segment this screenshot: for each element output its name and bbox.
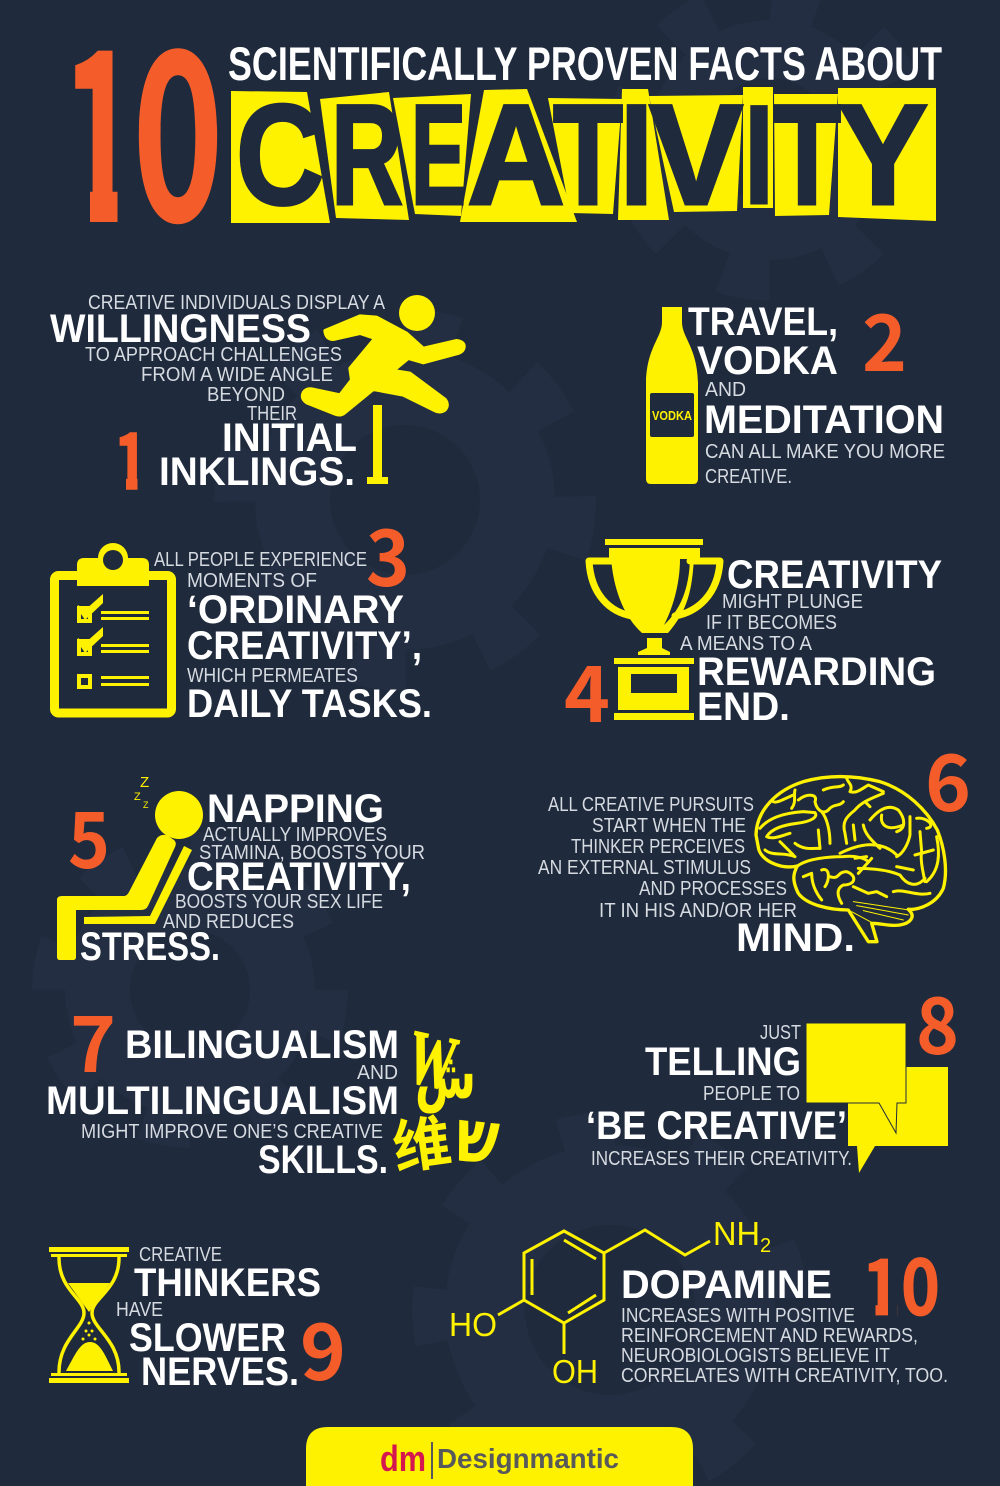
panel: fact 9 slower nerves — [49, 1243, 346, 1403]
text: fact 8: JUST — [760, 1021, 801, 1044]
panel: fact 4 rewarding end — [564, 539, 942, 745]
panel: fact 10 dopamine — [449, 1215, 948, 1390]
number 10: 10 — [862, 1226, 940, 1338]
panel: fact 7 bilingualism — [46, 983, 503, 1186]
footer logo tab — [306, 1427, 693, 1486]
text: fact 7: MIGHT IMPROVE ONE’S CREATIVE — [81, 1120, 383, 1143]
text: fact 5: AND REDUCES — [163, 910, 294, 933]
number 2: 2 — [862, 282, 907, 394]
text: fact 5: ACTUALLY IMPROVES — [203, 823, 387, 846]
icon: speech bubbles — [806, 1023, 948, 1173]
CREATIVITY cut-out letters: V — [649, 76, 743, 235]
text: fact 10 — [621, 1263, 948, 1387]
number 9: 9 — [300, 1291, 346, 1403]
text: fact 1: FROM A WIDE ANGLE — [141, 363, 333, 386]
text: fact 4: MIGHT PLUNGE — [722, 590, 863, 613]
text: fact 9: CREATIVE — [139, 1243, 222, 1266]
text: fact 2 — [688, 300, 945, 488]
icon: multilingual glyphs: 维 — [387, 1095, 456, 1186]
icon: sleeping figure — [57, 774, 203, 960]
text: fact 4: REWARDING — [697, 650, 936, 694]
icon: multilingual glyphs — [387, 1014, 503, 1186]
text: fact 7: SKILLS. — [258, 1138, 388, 1182]
text: fact 6: IT IN HIS AND/OR HER — [599, 899, 797, 922]
CREATIVITY cut-out letters: I — [743, 76, 775, 235]
CREATIVITY cut-out letters: R — [331, 76, 403, 235]
text: fact 8: ‘BE CREATIVE’ — [586, 1104, 847, 1148]
CREATIVITY cut-out letters — [231, 76, 936, 235]
text: fact 8 — [586, 1021, 852, 1170]
icon: multilingual glyphs: ش — [415, 1038, 476, 1114]
text: fact 10: REINFORCEMENT AND REWARDS, — [621, 1324, 918, 1347]
panel: fact 6 brain — [538, 722, 971, 960]
icon: vodka bottle — [646, 307, 698, 484]
panel: fact 3 ordinary creativity — [54, 497, 432, 726]
text: fact 6: ALL CREATIVE PURSUITS — [548, 793, 754, 816]
text: fact 1: WILLINGNESS — [50, 307, 311, 351]
text: fact 10: NEUROBIOLOGISTS BELIEVE IT — [621, 1344, 890, 1367]
text: fact 3 — [154, 548, 432, 726]
text: fact 6: MIND. — [736, 916, 855, 960]
text: fact 5: BOOSTS YOUR SEX LIFE — [175, 890, 383, 913]
icon: hourglass — [49, 1247, 129, 1383]
text: fact 3: ‘ORDINARY — [187, 588, 404, 632]
text: fact 5: NAPPING — [207, 787, 384, 831]
text: fact 5 — [80, 787, 425, 969]
number 1: 1 — [114, 400, 148, 512]
text: fact 9: SLOWER — [129, 1316, 286, 1360]
text: fact 8: PEOPLE TO — [703, 1082, 800, 1105]
text: fact 8: INCREASES THEIR CREATIVITY. — [591, 1147, 852, 1170]
text: fact 2: MEDITATION — [704, 398, 944, 442]
text: fact 10: DOPAMINE — [621, 1263, 832, 1307]
text: fact 10: INCREASES WITH POSITIVE — [621, 1304, 855, 1327]
text: fact 9: NERVES. — [141, 1350, 299, 1394]
text: fact 1: CREATIVE INDIVIDUALS DISPLAY A — [88, 291, 385, 314]
icon: sleeping figure: Z — [134, 791, 141, 803]
icon: dopamine molecule — [449, 1215, 771, 1390]
text: fact 9: THINKERS — [134, 1261, 321, 1305]
text: fact 2: CAN ALL MAKE YOU MORE — [705, 440, 945, 463]
text: fact 6 — [538, 793, 855, 960]
text: fact 7 — [46, 1023, 399, 1182]
text: fact 1: INKLINGS. — [159, 450, 355, 494]
text: fact 7: MULTILINGUALISM — [46, 1079, 399, 1123]
text: fact 4: CREATIVITY — [727, 553, 942, 597]
icon: multilingual glyphs: ש — [452, 1091, 503, 1182]
text: fact 1: INITIAL — [222, 416, 357, 460]
icon: dopamine molecule: NH — [713, 1215, 760, 1252]
text: fact 3: MOMENTS OF — [187, 569, 317, 592]
text: fact 1: THEIR — [247, 402, 297, 425]
number 6: 6 — [925, 722, 971, 834]
CREATIVITY cut-out letters: T — [553, 76, 623, 235]
number 7: 7 — [70, 983, 116, 1095]
text: fact 7: AND — [357, 1061, 398, 1084]
text: fact 6: THINKER PERCEIVES — [571, 835, 745, 858]
CREATIVITY cut-out letters: I — [620, 76, 653, 235]
text: fact 3: CREATIVITY’, — [187, 624, 422, 668]
text: fact 3: WHICH PERMEATES — [187, 664, 358, 687]
text: fact 2: TRAVEL, — [688, 300, 838, 344]
icon: vodka bottle: VODKA — [652, 408, 693, 423]
text: fact 9: HAVE — [116, 1298, 163, 1321]
CREATIVITY cut-out letters: Y — [838, 76, 928, 235]
text: fact 10: CORRELATES WITH CREATIVITY, TOO. — [621, 1364, 948, 1387]
text: fact 2: AND — [705, 378, 746, 401]
icon: dopamine molecule: 2 — [760, 1235, 771, 1257]
text: fact 2: VODKA — [697, 339, 838, 383]
text: fact 4: A MEANS TO A — [680, 632, 812, 655]
CREATIVITY cut-out letters: A — [467, 76, 565, 235]
text: fact 3: DAILY TASKS. — [187, 682, 432, 726]
title block — [60, 0, 942, 289]
text: fact 7: BILINGUALISM — [125, 1023, 399, 1067]
text: fact 6: AN EXTERNAL STIMULUS — [538, 856, 751, 879]
panel: fact 1 willingness — [50, 291, 464, 512]
text: fact 1: BEYOND — [207, 383, 285, 406]
icon: dopamine molecule: OH — [552, 1353, 598, 1390]
icon: sleeping figure: Z — [140, 774, 149, 791]
number 5: 5 — [68, 779, 110, 891]
text: fact 1: TO APPROACH CHALLENGES — [85, 343, 342, 366]
icon: clipboard — [54, 543, 172, 713]
CREATIVITY cut-out letters: T — [773, 76, 841, 235]
text: fact 6: START WHEN THE — [592, 814, 746, 837]
CREATIVITY cut-out letters: E — [411, 76, 466, 235]
icon: multilingual glyphs: W — [401, 1014, 464, 1106]
text: fact 3: ALL PEOPLE EXPERIENCE — [154, 548, 367, 571]
text: fact 2: CREATIVE. — [705, 465, 792, 488]
text: fact 9 — [116, 1243, 321, 1394]
panel: fact 5 napping — [57, 774, 425, 969]
text: fact 1 — [50, 291, 385, 494]
panel: fact 8 telling people — [586, 965, 959, 1173]
text: fact 5: STRESS. — [80, 925, 220, 969]
logo: dm mark: dm — [380, 1438, 426, 1479]
panel: fact 2 travel, vodka, meditation — [646, 282, 945, 488]
text: fact 4: END. — [697, 685, 790, 729]
text: fact 4 — [680, 553, 942, 729]
icon: dopamine molecule: HO — [449, 1306, 497, 1343]
CREATIVITY cut-out letters: C — [236, 76, 324, 235]
text: fact 6: AND PROCESSES — [639, 877, 787, 900]
number 3: 3 — [366, 497, 410, 609]
icon: brain — [756, 777, 945, 942]
number 4: 4 — [564, 633, 610, 745]
icon: trophy — [589, 539, 720, 720]
text: fact 4: IF IT BECOMES — [706, 611, 837, 634]
text: fact 5: STAMINA, BOOSTS YOUR — [199, 841, 425, 864]
text: fact 5: CREATIVITY, — [187, 855, 411, 899]
icon: hurdler — [302, 295, 464, 484]
logo: wordmark: Designmantic — [437, 1443, 619, 1474]
icon: sleeping figure: Z — [143, 800, 149, 810]
text: fact 8: TELLING — [645, 1040, 801, 1084]
number 8: 8 — [916, 965, 959, 1077]
